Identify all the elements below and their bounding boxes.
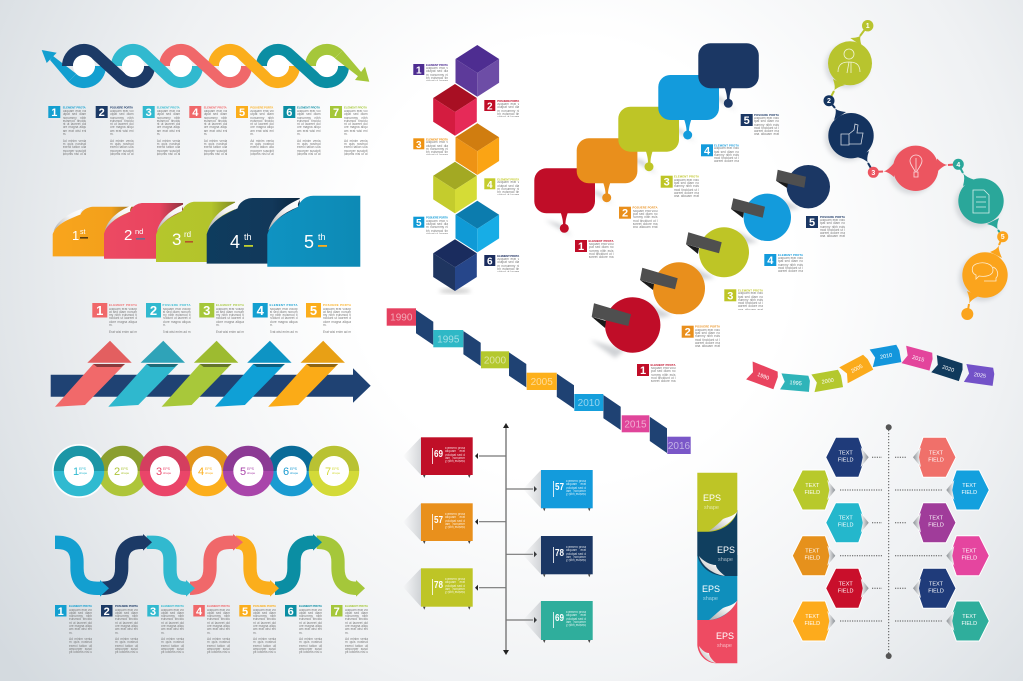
cube labels: 5 — [416, 218, 422, 229]
chain of seven rings: EPS — [290, 467, 298, 471]
speech bubble labels: ELEMENT PROTA — [588, 239, 614, 243]
chain of seven rings: 3 — [156, 466, 162, 478]
speech bubble labels: 3 — [664, 177, 670, 189]
cube labels: 1 — [416, 66, 422, 76]
hexagon tree with dotted axis: TEXT — [839, 516, 853, 522]
vertical timeline with flag boxes: 57 — [434, 515, 443, 526]
hexagon tree with dotted axis: TEXT — [962, 549, 977, 555]
speech bubble labels: ELEMENT PROTA — [714, 143, 739, 147]
blob path timeline with icons: 2 — [827, 98, 831, 105]
chain of seven rings: EPS — [247, 467, 255, 471]
hexagon tree with dotted axis: FIELD — [805, 556, 820, 562]
cube labels: 2 — [487, 102, 493, 112]
chain of seven rings: EPS — [205, 467, 213, 471]
hexagon tree with dotted axis: TEXT — [962, 614, 977, 620]
folded corner tabs 1st to 5th: 5 — [304, 232, 314, 252]
vertical EPS strip with curled corners: shape — [703, 596, 718, 602]
chain of seven rings: shape — [290, 471, 299, 475]
cube labels: 6 — [487, 256, 493, 268]
cube labels: POSUERE PORTA — [497, 99, 519, 103]
cube labels: ELEMENT PROTA — [497, 177, 519, 181]
hexagon tree with dotted axis: FIELD — [838, 588, 854, 594]
long navy arrow with folded up arrows — [51, 341, 371, 407]
text blocks above arrows: 4 — [257, 303, 265, 318]
chain of seven rings: 1 — [73, 466, 79, 478]
chain of seven rings: EPS — [163, 467, 171, 471]
hexagon tree with dotted axis: TEXT — [805, 549, 820, 555]
text columns under ribbon: 7 — [333, 107, 339, 119]
hexagon tree with dotted axis: TEXT — [839, 581, 853, 587]
blob path timeline with icons: 1 — [866, 23, 870, 30]
chain of seven rings: EPS — [121, 467, 129, 471]
hexagon tree with dotted axis: FIELD — [928, 588, 944, 594]
hexagon tree with dotted axis: FIELD — [838, 523, 854, 529]
text columns under serpentine: 5 — [242, 606, 248, 618]
text columns under serpentine: 6 — [288, 606, 294, 618]
speech bubble labels: ELEMENT PROTA — [674, 175, 699, 179]
text columns under ribbon: 2 — [99, 107, 105, 119]
circles with dark tags — [590, 165, 830, 358]
speech bubble labels: 5 — [744, 115, 750, 127]
chain of seven rings: 5 — [240, 466, 246, 478]
diagonal staircase timeline: 1995 — [437, 334, 460, 345]
chain of seven rings: 6 — [283, 466, 289, 478]
diagonal staircase timeline: 2016 — [668, 441, 691, 452]
speech bubble labels: 1 — [578, 241, 584, 253]
chain of seven rings — [52, 444, 360, 498]
text columns under serpentine — [55, 604, 368, 654]
cube labels: ELEMENT PROTA — [497, 254, 519, 258]
text columns under serpentine: ELEMENT PROTA — [345, 604, 368, 608]
text columns under serpentine: POSUERE PORTA — [115, 604, 138, 608]
chain of seven rings: 4 — [198, 466, 204, 478]
small curved tab timeline: 2010 — [880, 353, 893, 361]
small curved tab timeline: 1990 — [756, 372, 770, 382]
vertical EPS strip with curled corners: shape — [718, 557, 733, 563]
small curved tab timeline: 2015 — [911, 355, 925, 364]
circle tag labels: 2 — [685, 327, 691, 339]
text columns under ribbon: ELEMENT PROTA — [344, 106, 367, 110]
chain of seven rings: shape — [163, 471, 172, 475]
text columns under serpentine: ELEMENT PROTA — [161, 604, 184, 608]
folded corner tabs 1st to 5th: 2 — [124, 227, 132, 244]
stacked cubes — [433, 45, 499, 293]
chain of seven rings: 7 — [325, 466, 331, 478]
text columns under serpentine: ELEMENT PROTA — [69, 604, 92, 608]
folded corner tabs 1st to 5th — [53, 196, 360, 267]
hexagon tree with dotted axis: TEXT — [929, 581, 944, 587]
circle tag labels: 3 — [727, 290, 733, 302]
vertical timeline with flag boxes: 78 — [434, 580, 443, 591]
folded corner tabs 1st to 5th: rd — [184, 230, 191, 239]
folded corner tabs 1st to 5th: th — [318, 232, 326, 242]
hexagon tree with dotted axis — [792, 424, 989, 659]
small curved tab timeline: 1995 — [789, 380, 802, 387]
text blocks above arrows: POSUERE PORTA — [323, 303, 351, 307]
circle tag labels — [637, 215, 845, 382]
text columns under ribbon: 5 — [239, 107, 245, 119]
circle tag labels: 4 — [767, 255, 774, 267]
hexagon tree with dotted axis: FIELD — [928, 457, 944, 463]
speech bubble labels: POSUERE PORTA — [632, 206, 658, 210]
circle tag labels: ELEMENT PROTA — [738, 288, 763, 292]
text columns under serpentine: 7 — [334, 606, 340, 618]
text columns under serpentine: ELEMENT PROTA — [299, 604, 322, 608]
vertical timeline with flag boxes: 69 — [555, 613, 564, 624]
vertical EPS strip with curled corners: EPS — [703, 493, 721, 503]
text blocks above arrows: 2 — [150, 303, 157, 318]
speech bubble labels: POSUERE PORTA — [754, 113, 779, 117]
hexagon tree with dotted axis: FIELD — [838, 457, 854, 463]
folded corner tabs 1st to 5th: nd — [135, 227, 143, 236]
hexagon tree with dotted axis: TEXT — [805, 483, 820, 489]
text columns under ribbon: POSUERE PORTA — [250, 106, 273, 110]
speech bubble timeline — [534, 43, 759, 236]
circle tag labels: POSUERE PORTA — [695, 325, 720, 329]
vertical EPS strip with curled corners: EPS — [702, 584, 720, 594]
text columns under ribbon: ELEMENT PROTA — [297, 106, 320, 110]
text blocks above arrows: 5 — [310, 303, 317, 318]
vertical EPS strip with curled corners: shape — [717, 643, 732, 649]
diagonal staircase timeline — [387, 308, 691, 454]
text blocks above arrows: ELEMENT PROTA — [216, 303, 244, 307]
folded corner tabs 1st to 5th: th — [244, 232, 252, 242]
text blocks above arrows: ELEMENT PROTA — [270, 303, 298, 307]
twisted ribbon timeline — [42, 49, 369, 83]
text columns under ribbon: POSUERE PORTA — [110, 106, 133, 110]
text blocks above arrows: 3 — [203, 303, 210, 318]
cube labels: POSUERE PORTA — [426, 216, 448, 220]
chain of seven rings: EPS — [79, 467, 87, 471]
vertical timeline with flag boxes: 57 — [555, 482, 564, 493]
cube labels — [413, 63, 519, 272]
text columns under ribbon: 3 — [146, 107, 152, 119]
diagonal staircase timeline: 2000 — [484, 356, 507, 366]
hexagon tree with dotted axis: FIELD — [962, 556, 977, 562]
small curved tab timeline: 2000 — [821, 378, 834, 386]
text columns under serpentine: 1 — [58, 606, 64, 618]
chain of seven rings: 2 — [114, 466, 120, 478]
chain of seven rings: shape — [205, 471, 214, 475]
text columns under ribbon: ELEMENT PROTA — [63, 106, 86, 110]
folded corner tabs 1st to 5th: st — [80, 229, 86, 236]
text columns under serpentine: 4 — [196, 606, 203, 618]
blob path timeline with icons — [824, 20, 1008, 320]
speech bubble labels: 4 — [704, 145, 711, 157]
cube labels: ELEMENT PROTA — [426, 63, 448, 67]
vertical EPS strip with curled corners: EPS — [717, 545, 735, 555]
hexagon tree with dotted axis: FIELD — [962, 621, 977, 627]
speech bubble labels — [575, 113, 779, 258]
cube labels: ELEMENT PROTA — [426, 137, 448, 141]
vertical EPS strip with curled corners: shape — [704, 505, 719, 511]
chain of seven rings: shape — [332, 471, 341, 475]
small curved tab timeline: 2020 — [941, 365, 955, 374]
text columns under ribbon: ELEMENT PROTA — [204, 106, 227, 110]
text columns under serpentine: 3 — [150, 606, 156, 618]
text columns under serpentine: POSUERE PORTA — [253, 604, 276, 608]
vertical EPS strip with curled corners — [697, 473, 737, 663]
hexagon tree with dotted axis: FIELD — [962, 490, 977, 496]
hexagon tree with dotted axis: TEXT — [805, 614, 820, 620]
text blocks above arrows: ELEMENT PROTA — [109, 303, 137, 307]
hexagon tree with dotted axis: TEXT — [929, 516, 944, 522]
chain of seven rings: shape — [79, 471, 88, 475]
text columns under ribbon — [48, 106, 368, 156]
cube labels: 3 — [416, 140, 422, 151]
serpentine arrow timeline — [55, 534, 365, 597]
circle tag labels: POSUERE PORTA — [820, 215, 845, 219]
hexagon tree with dotted axis: TEXT — [929, 450, 944, 456]
text columns under serpentine: ELEMENT PROTA — [207, 604, 230, 608]
diagonal staircase timeline: 2010 — [578, 398, 600, 409]
chain of seven rings: shape — [247, 471, 256, 475]
text blocks above arrows — [92, 303, 351, 332]
circle tag labels: 1 — [640, 365, 646, 377]
hexagon tree with dotted axis: TEXT — [962, 483, 977, 489]
hexagon tree with dotted axis: FIELD — [805, 490, 820, 496]
small curved tab timeline — [746, 344, 995, 392]
text columns under ribbon: 6 — [286, 107, 292, 119]
folded corner tabs 1st to 5th: 3 — [172, 230, 181, 249]
circle tag labels: 5 — [809, 217, 815, 229]
hexagon tree with dotted axis: TEXT — [839, 450, 853, 456]
circle tag labels: ELEMENT PROTA — [650, 363, 676, 367]
vertical timeline with flag boxes: 69 — [434, 449, 443, 460]
text columns under ribbon: 1 — [51, 107, 57, 119]
chain of seven rings: EPS — [332, 467, 340, 471]
vertical timeline with flag boxes: 78 — [555, 548, 564, 559]
text blocks above arrows: 1 — [96, 303, 103, 318]
folded corner tabs 1st to 5th: 4 — [230, 232, 240, 252]
text columns under serpentine: 2 — [104, 606, 110, 618]
cube labels: 4 — [487, 180, 493, 191]
text columns under ribbon: ELEMENT PROTA — [157, 106, 180, 110]
speech bubble labels: 2 — [622, 208, 628, 220]
small curved tab timeline: 2025 — [973, 372, 986, 380]
blob path timeline with icons: 4 — [956, 162, 960, 169]
circle tag labels: ELEMENT PROTA — [778, 253, 803, 257]
small curved tab timeline: 2005 — [850, 364, 864, 375]
chain of seven rings: shape — [121, 471, 130, 475]
text columns under ribbon: 4 — [192, 107, 199, 119]
hexagon tree with dotted axis: FIELD — [928, 523, 944, 529]
vertical EPS strip with curled corners: EPS — [716, 631, 734, 641]
diagonal staircase timeline: 1990 — [390, 313, 413, 324]
diagonal staircase timeline: 2005 — [531, 377, 553, 388]
blob path timeline with icons: 3 — [871, 170, 875, 177]
hexagon tree with dotted axis: FIELD — [805, 621, 820, 627]
diagonal staircase timeline: 2015 — [624, 420, 647, 430]
text blocks above arrows: POSUERE PORTA — [162, 303, 190, 307]
vertical timeline with flag boxes — [403, 423, 593, 655]
folded corner tabs 1st to 5th: 1 — [72, 228, 79, 243]
blob path timeline with icons: 5 — [1001, 234, 1005, 241]
